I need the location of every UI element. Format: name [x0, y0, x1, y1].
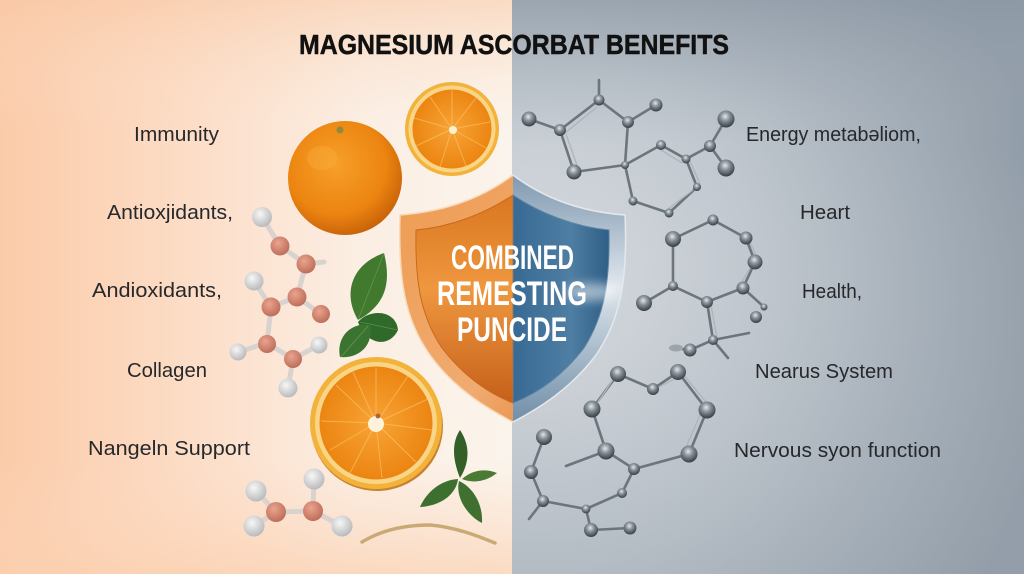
- molecule: steel middle: [636, 214, 768, 358]
- label: Nervous syon function: Nervous syon function: [734, 440, 941, 462]
- label: Antioxjidants: Antioxjidants,: [107, 202, 233, 224]
- left benefit labels: [88, 124, 250, 460]
- shield: left inner face: [416, 195, 513, 403]
- icon: large green leaves: [339, 253, 398, 357]
- title: MAGNESIUM ASCORBAT BENEFITS: [299, 29, 729, 60]
- label: Andioxidants: Andioxidants,: [92, 280, 222, 302]
- label: Health: Health,: [802, 281, 862, 303]
- shield: glare: [566, 283, 618, 301]
- shield heading text: REMESTING: [437, 275, 587, 313]
- molecule: steel lower: [524, 364, 716, 537]
- molecule: left pink and white upper: [230, 207, 330, 398]
- panel: left peach background: [0, 0, 512, 574]
- shield: [400, 175, 626, 422]
- icon: whole orange: [288, 121, 402, 235]
- shield heading text: COMBINED: [451, 239, 574, 277]
- label: Nangeln Support: Nangeln Support: [88, 438, 250, 460]
- shield heading text: PUNCIDE: [457, 311, 567, 349]
- icon: small green leaves: [420, 430, 497, 523]
- shield: right rim: [513, 174, 626, 423]
- label: Energy metabolism: Energy metabəliom,: [746, 124, 921, 146]
- icon: orange slice bottom: [310, 357, 443, 491]
- panel: right grey background: [512, 0, 1024, 574]
- shield heading text: [437, 239, 587, 349]
- right benefit labels: [734, 124, 941, 462]
- molecule: steel upper: [522, 80, 734, 218]
- shield: left rim: [399, 174, 513, 423]
- label: Nearus System: Nearus System: [755, 361, 893, 383]
- molecule: left pink and white lower: [244, 468, 352, 536]
- shield: right inner face: [513, 195, 609, 403]
- label: Collagen: Collagen: [127, 360, 207, 382]
- label: Heart: Heart: [800, 202, 850, 224]
- icon: twig: [362, 525, 495, 543]
- icon: orange slice top: [405, 82, 499, 176]
- label: Immunity: Immunity: [134, 124, 219, 146]
